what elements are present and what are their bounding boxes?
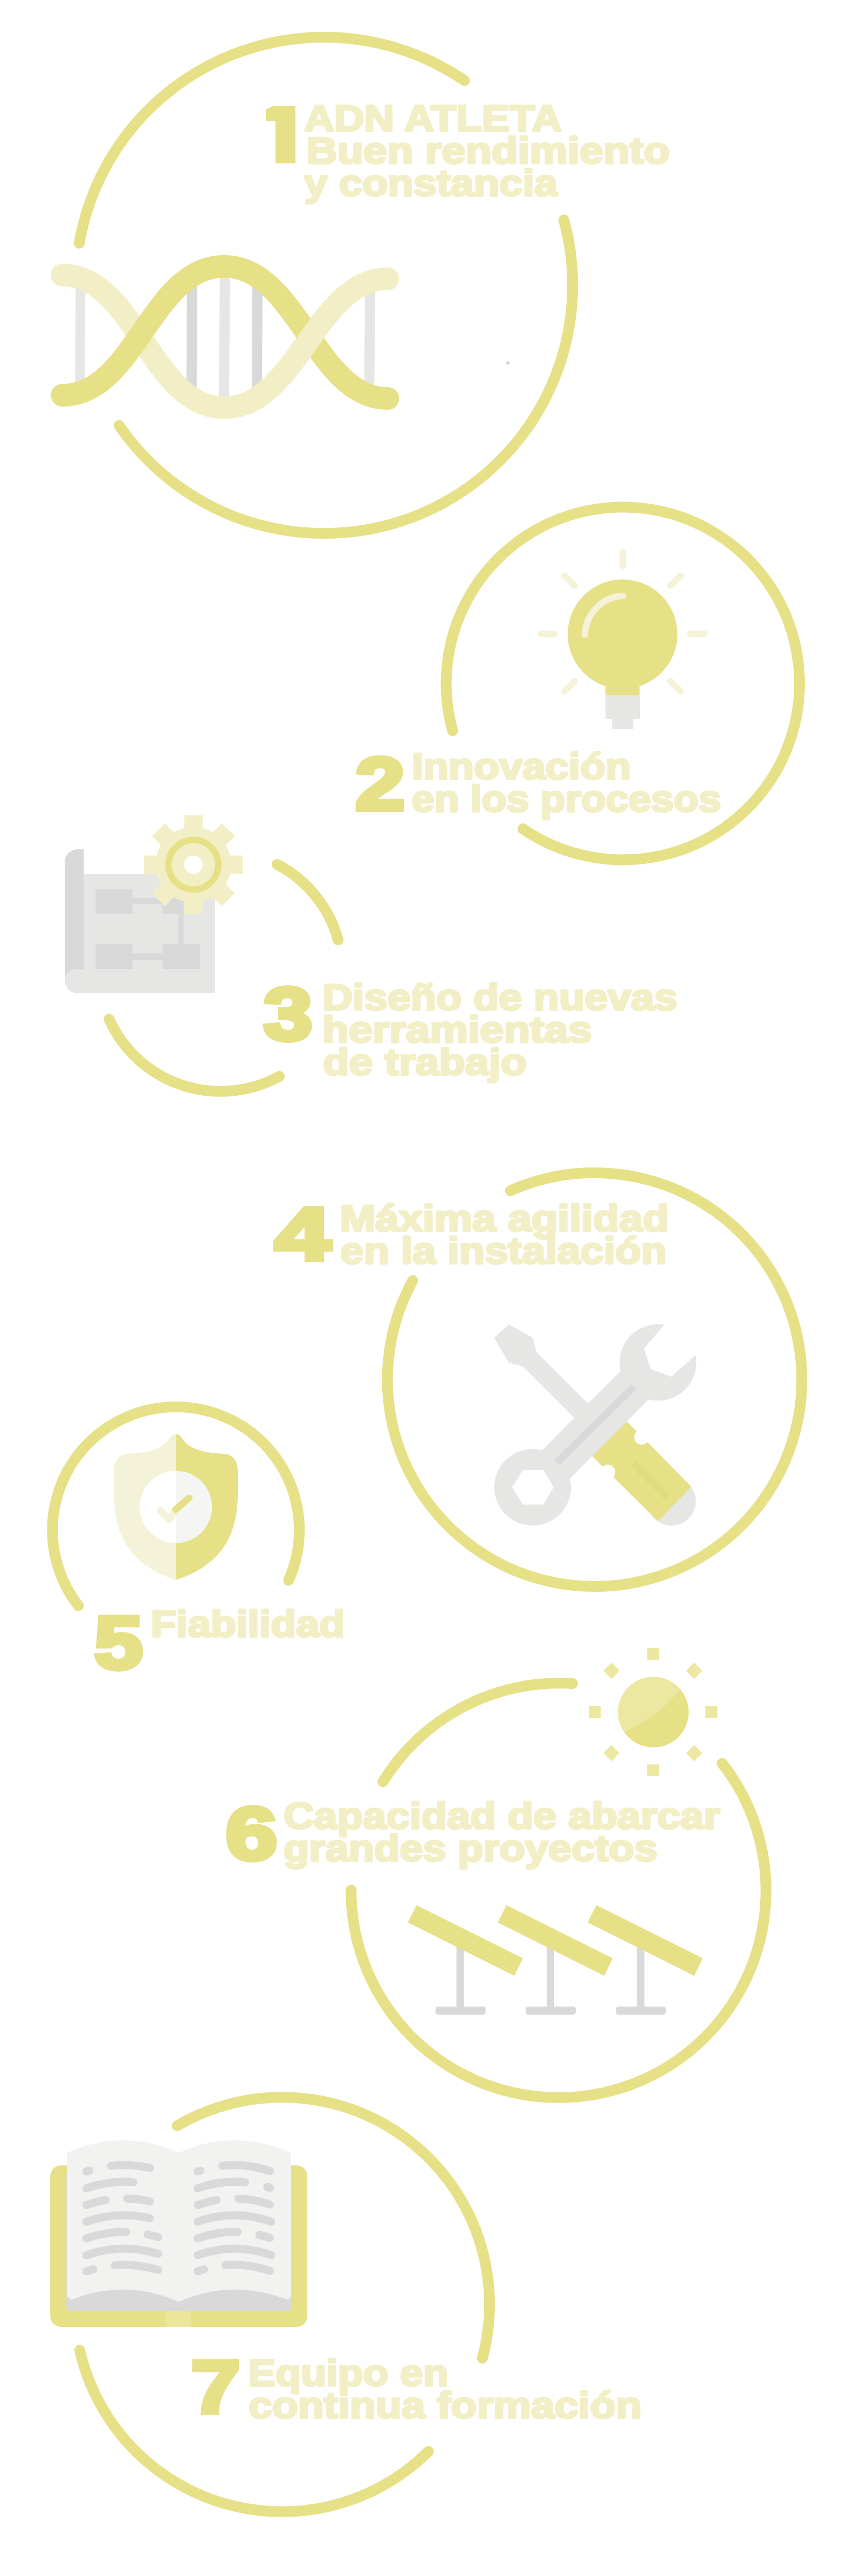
- heading 1: y constancia: [304, 162, 558, 204]
- number 6: 6: [226, 1792, 277, 1876]
- heading 4: Máxima agilidad: [340, 1197, 669, 1239]
- ring 3: [109, 864, 338, 1091]
- heading 3: [322, 976, 677, 1083]
- heading 7: continua formación: [249, 2384, 642, 2426]
- heading 6: [284, 1795, 720, 1869]
- heading 3: Diseño de nuevas: [322, 976, 677, 1018]
- heading 2: en los procesos: [411, 778, 721, 820]
- ring 7: [80, 2097, 490, 2512]
- heading 1: ADN ATLETA: [304, 97, 562, 139]
- heading 1: [304, 97, 670, 204]
- number 1: 1: [256, 92, 310, 175]
- heading 2: [411, 745, 721, 820]
- icon: light bulb: [541, 552, 704, 729]
- icon: gear: [144, 815, 243, 914]
- heading 3: de trabajo: [323, 1041, 527, 1083]
- icon: DNA helix: [62, 266, 509, 408]
- panel 6: proyectos: [226, 1648, 766, 2098]
- ring 5: [52, 1407, 299, 1606]
- heading 6: grandes proyectos: [284, 1827, 657, 1869]
- ring 2: [446, 507, 800, 860]
- icon: shield: [114, 1434, 238, 1580]
- heading 2: Innovación: [411, 745, 631, 787]
- number 5: 5: [94, 1602, 143, 1685]
- panel 7: formacion: [50, 2097, 642, 2512]
- heading 3: herramientas: [322, 1008, 592, 1050]
- number 7: 7: [191, 2346, 240, 2429]
- icon: open book: [50, 2140, 307, 2327]
- icon: blueprint: [65, 849, 215, 993]
- number 2: 2: [355, 743, 404, 826]
- panel 5: fiabilidad: [52, 1407, 345, 1685]
- heading 1: Buen rendimiento: [306, 129, 670, 171]
- number 4: 4: [275, 1193, 330, 1276]
- heading 4: en la instalación: [340, 1229, 666, 1272]
- heading 7: [248, 2352, 642, 2426]
- panel 3: diseno: [65, 815, 677, 1091]
- icon: solar panels: [408, 1905, 703, 2015]
- panel 1: ADN atleta: [62, 37, 670, 533]
- heading 6: Capacidad de abarcar: [284, 1795, 720, 1837]
- heading 7: Equipo en: [248, 2352, 449, 2394]
- panel 2: innovacion: [355, 507, 800, 860]
- ring 6: [351, 1683, 766, 2098]
- panel 4: agilidad: [275, 1173, 802, 1586]
- icon: sun: [589, 1648, 718, 1776]
- number 3: 3: [264, 973, 312, 1056]
- heading 4: [340, 1197, 669, 1272]
- ring 1: [79, 37, 573, 533]
- book text lines: [86, 2165, 271, 2271]
- heading 5: Fiabilidad: [151, 1603, 345, 1645]
- icon: screwdriver and wrench: [494, 1321, 700, 1526]
- ring 4: [388, 1173, 802, 1586]
